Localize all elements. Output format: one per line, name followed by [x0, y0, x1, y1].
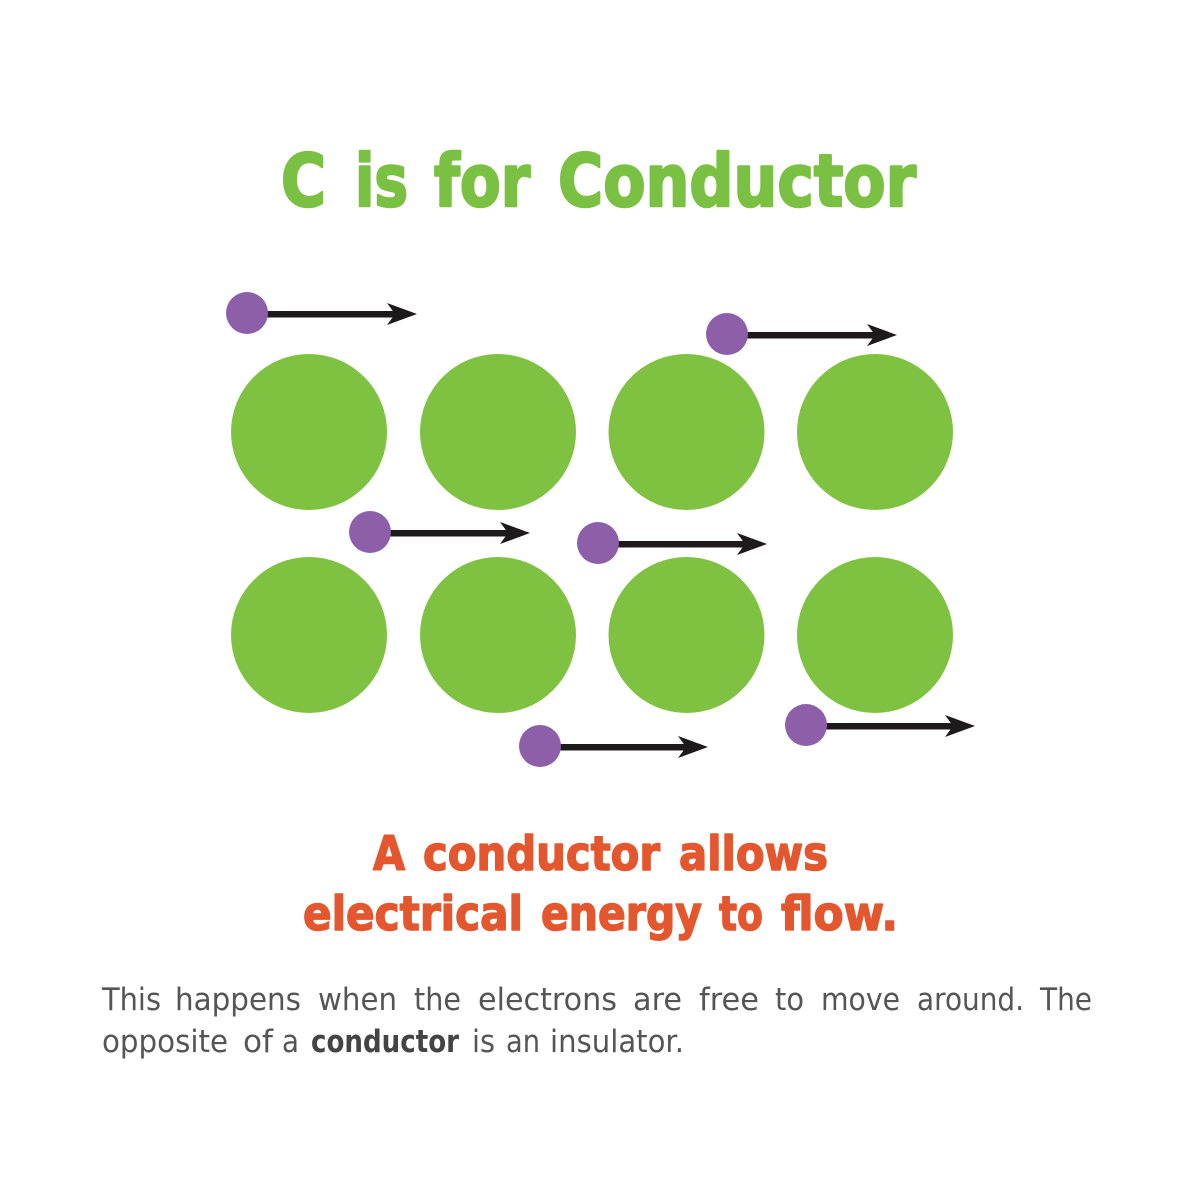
electron with arrow, middle left: [349, 511, 530, 553]
body text: when: [318, 982, 397, 1018]
body text: [101, 982, 1092, 1060]
body text: the: [414, 982, 461, 1018]
body text: is: [472, 1024, 495, 1060]
body text: This: [101, 982, 161, 1018]
body text: The: [1039, 982, 1092, 1018]
body text: electrons: [478, 982, 617, 1018]
body text: a: [282, 1024, 299, 1060]
body text: insulator.: [550, 1024, 684, 1060]
subheading: flow.: [781, 887, 898, 942]
subheading: A: [373, 827, 406, 882]
subheading: conductor: [423, 827, 661, 882]
body text: free: [699, 982, 759, 1018]
body text: to: [775, 982, 804, 1018]
title: [281, 139, 916, 223]
title: Conductor: [558, 139, 916, 223]
body text: an: [506, 1024, 540, 1060]
body text: opposite: [102, 1024, 228, 1060]
title: is: [355, 139, 408, 223]
body text: happens: [175, 982, 301, 1018]
body text: move: [821, 982, 900, 1018]
subheading: [303, 827, 898, 942]
electron with arrow, middle right: [577, 522, 767, 564]
subheading: allows: [679, 827, 828, 882]
body text: conductor: [311, 1024, 460, 1060]
electron with arrow, top right: [706, 313, 897, 355]
title: for: [434, 139, 530, 223]
diagram: atoms and electrons: [226, 292, 975, 767]
body text: around.: [917, 982, 1024, 1018]
body text: are: [633, 982, 682, 1018]
subheading: energy: [541, 887, 702, 942]
title: C: [281, 139, 326, 223]
subheading: to: [719, 887, 763, 942]
subheading: electrical: [303, 887, 523, 942]
atom lattice: [231, 354, 953, 713]
electron with arrow, bottom centre: [519, 725, 708, 767]
electron with arrow, top left: [226, 292, 417, 334]
body text: of: [243, 1024, 274, 1060]
electron with arrow, bottom right: [785, 704, 975, 746]
